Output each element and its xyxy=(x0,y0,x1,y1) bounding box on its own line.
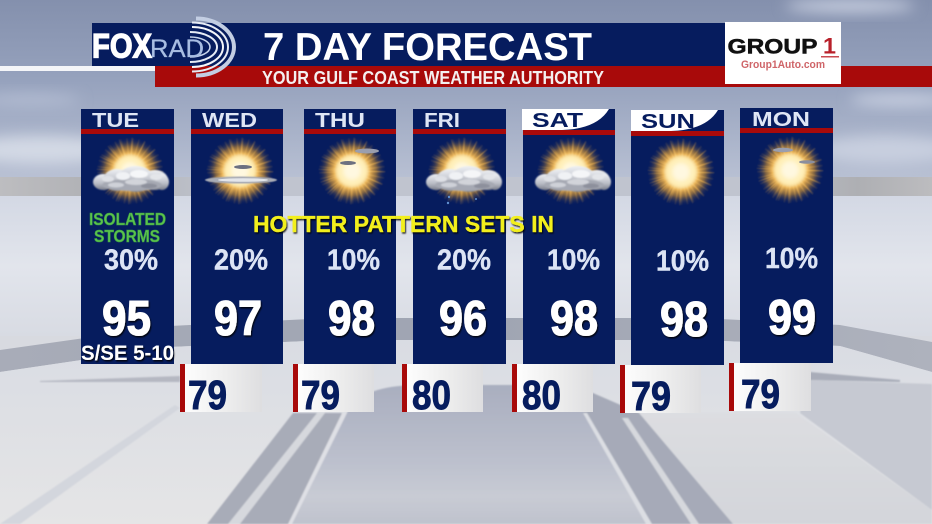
low temp: Wednesday: 79 xyxy=(188,372,227,418)
panel: Tuesday xyxy=(81,109,174,365)
day label: SAT xyxy=(532,110,583,132)
condition text: STORMS xyxy=(94,226,160,246)
low temp: Monday xyxy=(729,363,811,417)
high temp: 95 xyxy=(102,292,151,346)
rain chance: 10% xyxy=(656,246,709,278)
panel: Wednesday xyxy=(191,109,283,364)
condition text xyxy=(89,209,166,246)
high temp: 99 xyxy=(768,291,816,345)
rain chance: 10% xyxy=(547,244,600,276)
callout: hotter pattern: HOTTER PATTERN SETS IN xyxy=(253,211,554,237)
tagline: YOUR GULF COAST WEATHER AUTHORITY xyxy=(262,67,605,88)
high temp: 97 xyxy=(214,292,262,346)
panel: Thursday xyxy=(304,109,396,364)
day label: THU xyxy=(315,110,365,132)
icon: sun, cloud and rain xyxy=(426,137,502,205)
low temp: Saturday: 80 xyxy=(522,372,561,418)
sponsor logo: Group 1 xyxy=(725,22,841,84)
low temp: Monday: 79 xyxy=(741,371,780,417)
rain chance: 10% xyxy=(765,243,818,275)
high temp: 98 xyxy=(660,293,708,347)
logo: FOX RAD: RAD xyxy=(150,35,204,63)
low temp: Wednesday xyxy=(180,364,262,418)
condition text: ISOLATED xyxy=(89,209,166,229)
rain chance: 20% xyxy=(214,244,268,276)
sponsor logo: Group 1: 1 xyxy=(823,34,836,58)
day label: SUN xyxy=(641,111,695,133)
rain chance: 20% xyxy=(437,244,491,276)
logo: FOX RAD: FOX xyxy=(92,28,152,66)
header banner xyxy=(0,18,932,88)
panel: Monday xyxy=(740,108,833,363)
day label: TUE xyxy=(92,110,139,132)
low temp: Sunday xyxy=(620,365,701,419)
logo: FOX RAD xyxy=(92,18,234,76)
high temp: 96 xyxy=(439,292,487,346)
low temp: Thursday xyxy=(293,364,374,418)
panel: Friday xyxy=(413,109,506,364)
day label: MON xyxy=(752,109,810,131)
panel: Saturday xyxy=(522,109,615,364)
high temp: 98 xyxy=(328,292,375,346)
icon: sun with thin clouds xyxy=(205,137,277,205)
high temp: 98 xyxy=(550,292,598,346)
panel: Sunday xyxy=(631,110,724,365)
icon: sun with small clouds xyxy=(756,136,824,204)
rain chance: 30% xyxy=(104,244,158,276)
low temp: Friday: 80 xyxy=(412,372,451,418)
day label: FRI xyxy=(424,110,460,132)
low temp: Thursday: 79 xyxy=(301,372,340,418)
icon: sun behind cloud xyxy=(535,137,611,205)
icon: sun behind cloud xyxy=(93,137,169,205)
icon: sun xyxy=(647,138,715,206)
icon: sun with small clouds xyxy=(318,137,386,205)
wind: S/SE 5-10 xyxy=(81,342,174,365)
low temp: Saturday xyxy=(512,364,593,418)
title: 7 DAY FORECAST xyxy=(263,26,592,69)
day label: WED xyxy=(202,110,257,132)
low temp: Friday xyxy=(402,364,483,418)
sponsor logo: Group 1: Group1Auto.com xyxy=(741,59,825,71)
sponsor logo: Group 1: GROUP xyxy=(728,36,818,58)
rain chance: 10% xyxy=(327,244,380,276)
low temp: Sunday: 79 xyxy=(631,373,671,419)
